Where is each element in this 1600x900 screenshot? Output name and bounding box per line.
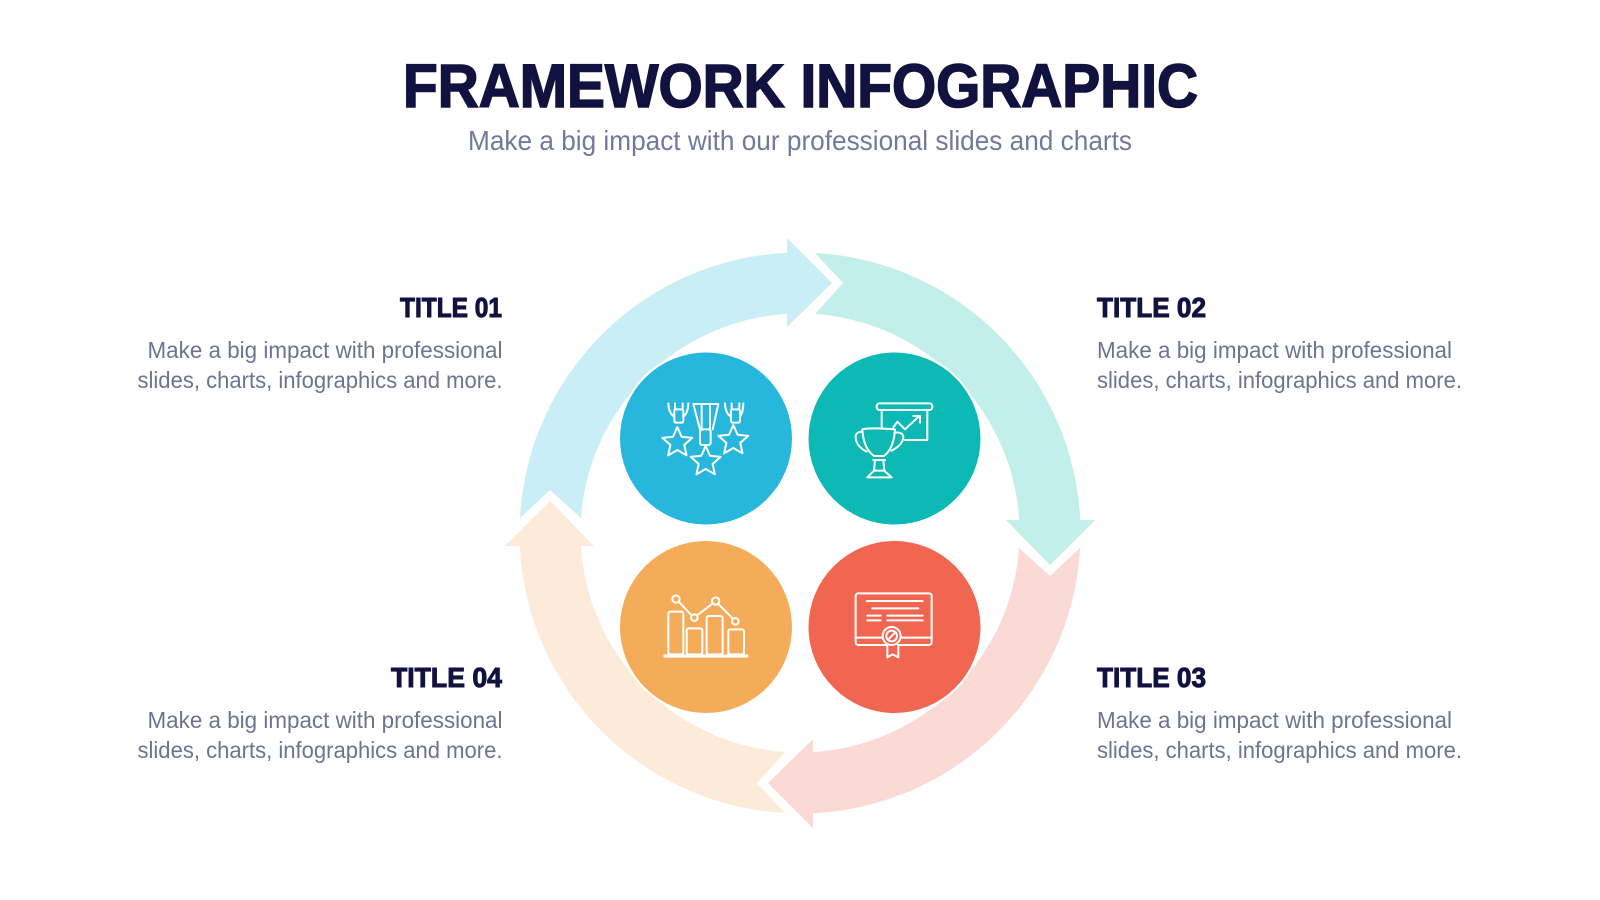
arrow: teal segment [815, 253, 1095, 565]
icon: medals with stars [662, 403, 748, 474]
description: Make a big impact with professional [148, 337, 502, 363]
description: Make a big impact with professional [1097, 337, 1452, 363]
circle: red certificate [808, 541, 980, 713]
description: Make a big impact with professional [148, 707, 502, 733]
panel: title 03 [1097, 662, 1462, 763]
description: slides, charts, infographics and more. [1097, 367, 1462, 393]
panel: title 02 [1097, 292, 1462, 393]
icon: certificate with seal [856, 593, 932, 657]
heading: TITLE 03 [1097, 662, 1206, 693]
heading: TITLE 04 [391, 662, 502, 693]
circle: teal trophy [808, 352, 980, 524]
subtitle: Make a big impact with our professional slides and charts [468, 125, 1132, 156]
description: slides, charts, infographics and more. [138, 367, 502, 393]
arrow: pink segment [768, 548, 1080, 828]
description: slides, charts, infographics and more. [1097, 737, 1462, 763]
description: slides, charts, infographics and more. [138, 737, 502, 763]
cycle diagram [505, 238, 1095, 828]
panel: title 04 [138, 662, 502, 763]
icon: bar and line chart [665, 595, 747, 656]
panel: title 01 [138, 292, 502, 393]
icon: trophy and presentation board [856, 403, 932, 477]
arrow: blue segment [520, 238, 832, 518]
heading: TITLE 01 [400, 292, 502, 323]
description: Make a big impact with professional [1097, 707, 1452, 733]
circle: orange chart [620, 541, 792, 713]
title: FRAMEWORK INFOGRAPHIC [403, 52, 1198, 120]
arrow: orange segment [505, 501, 785, 813]
circle: blue medals [620, 352, 792, 524]
heading: TITLE 02 [1097, 292, 1206, 323]
